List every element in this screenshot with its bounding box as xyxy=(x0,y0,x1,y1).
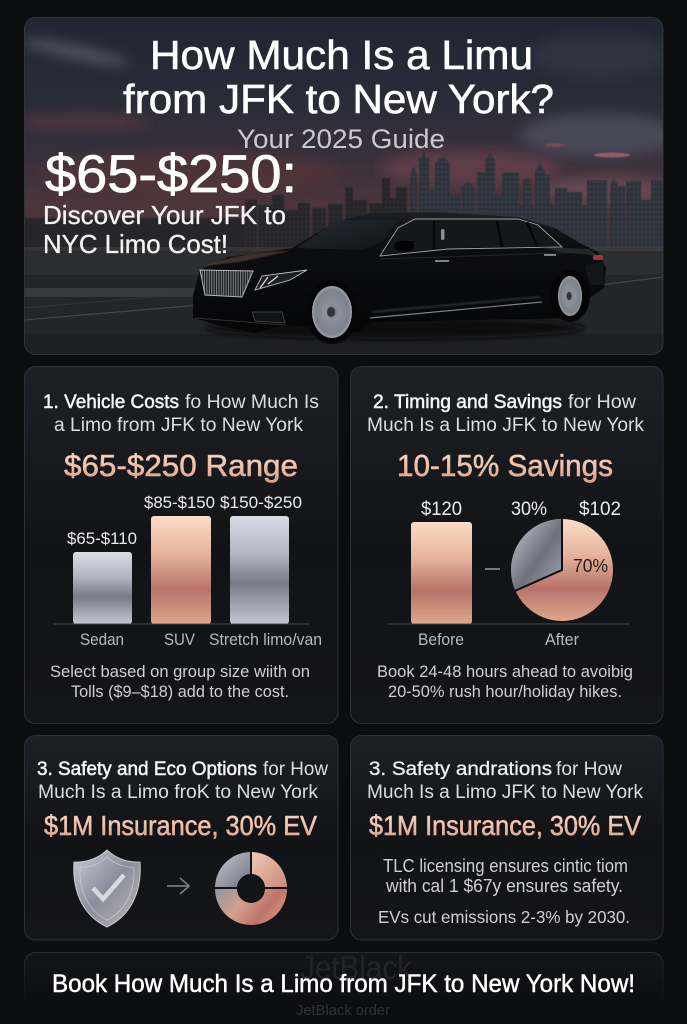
panel: hero xyxy=(20,17,680,356)
icon: black limousine xyxy=(193,212,606,344)
footer note: JetBlack order xyxy=(296,1002,390,1019)
bar chart: vehicle prices: Stretch limo/van xyxy=(209,630,322,649)
bar chart: vehicle prices: $150-$250 xyxy=(220,493,302,512)
hero tagline: Discover Your JFK to xyxy=(43,200,286,230)
key figure: $1M Insurance, 30% EV xyxy=(369,810,641,841)
heading xyxy=(43,392,319,436)
heading xyxy=(367,759,643,803)
before and after chart: $120 xyxy=(421,499,462,520)
donut chart xyxy=(215,852,287,925)
description: EVs cut emissions 2-3% by 2030. xyxy=(378,907,630,927)
ghost logo: JetBlack xyxy=(300,949,412,986)
heading: Much Is a Limo JFK to New York xyxy=(367,782,643,803)
before and after chart xyxy=(388,499,630,649)
headlight xyxy=(255,270,307,290)
pie chart: 70% xyxy=(573,556,608,576)
rear wheel xyxy=(560,298,590,322)
panel: call to action xyxy=(24,949,663,1019)
heading: 3. Safety andrations xyxy=(369,759,552,780)
pie chart xyxy=(511,519,613,621)
bar chart: vehicle prices: Sedan xyxy=(80,630,124,649)
description xyxy=(50,662,310,701)
before and after chart: $102 xyxy=(579,499,621,520)
hero photo: night skyline and limo xyxy=(20,17,680,356)
key figure: $65-$250 Range xyxy=(64,448,298,483)
front wheel xyxy=(313,334,350,344)
heading: 3. Safety and Eco Options xyxy=(37,759,257,780)
key figure: 10-15% Savings xyxy=(397,448,613,483)
side windows xyxy=(384,239,560,254)
heading: fo How Much Is xyxy=(185,392,319,413)
description: TLC licensing ensures cintic tiom xyxy=(383,856,628,876)
description: Book 24-48 hours ahead to avoibig xyxy=(377,662,633,681)
description xyxy=(377,662,633,701)
bar chart: vehicle prices: $85-$150 xyxy=(144,493,215,512)
heading: 1. Vehicle Costs xyxy=(43,392,179,413)
description: 20-50% rush hour/holiday hikes. xyxy=(388,682,622,701)
grille xyxy=(200,270,253,297)
bar chart: vehicle prices: $65-$110 xyxy=(67,529,137,548)
panel: vehicle costs xyxy=(24,366,338,724)
heading: for How xyxy=(568,392,636,413)
heading: Much Is a Limo froK to New York xyxy=(38,782,319,803)
panel: timing and savings xyxy=(350,366,663,724)
description: with cal 1 $67y ensures safety. xyxy=(385,876,623,896)
mirror xyxy=(393,240,414,252)
before and after chart: 30% xyxy=(511,499,547,520)
heading xyxy=(367,392,644,436)
before and after chart: Before xyxy=(418,630,464,649)
heading: for How xyxy=(556,759,622,780)
description: Select based on group size wiith on xyxy=(50,662,310,681)
bar chart: vehicle prices: SUV xyxy=(164,630,196,649)
waterfront and road xyxy=(24,247,664,251)
skyline xyxy=(24,143,663,252)
panel: safety and regulations xyxy=(350,736,663,940)
heading: Much Is a Limo JFK to New York xyxy=(367,415,644,436)
title xyxy=(123,32,554,122)
tail light xyxy=(593,255,603,260)
hero tagline: NYC Limo Cost! xyxy=(43,229,228,259)
heading: a Limo from JFK to New York xyxy=(54,415,303,436)
heading xyxy=(37,759,328,803)
windshield xyxy=(297,220,398,250)
description: Tolls ($9–$18) add to the cost. xyxy=(71,682,289,701)
hero tagline xyxy=(43,200,286,259)
call to action text: Book How Much Is a Limo from JFK to New York Now! xyxy=(52,970,635,998)
heading: for How xyxy=(263,759,328,780)
hood highlight xyxy=(205,251,290,266)
panel: safety and eco options xyxy=(24,736,338,940)
chrome trim xyxy=(370,302,542,318)
title: How Much Is a Limu xyxy=(150,32,533,78)
headline price: $65-$250: xyxy=(45,145,297,204)
icon: arrow xyxy=(167,878,189,894)
icon: shield with check xyxy=(74,850,140,927)
heading: 2. Timing and Savings xyxy=(373,392,562,413)
key figure: $1M Insurance, 30% EV xyxy=(44,810,317,841)
title: from JFK to New York? xyxy=(123,76,554,122)
bar chart: vehicle prices xyxy=(53,493,322,649)
subtitle: Your 2025 Guide xyxy=(237,124,445,154)
description xyxy=(378,856,630,927)
before and after chart: After xyxy=(545,630,579,649)
